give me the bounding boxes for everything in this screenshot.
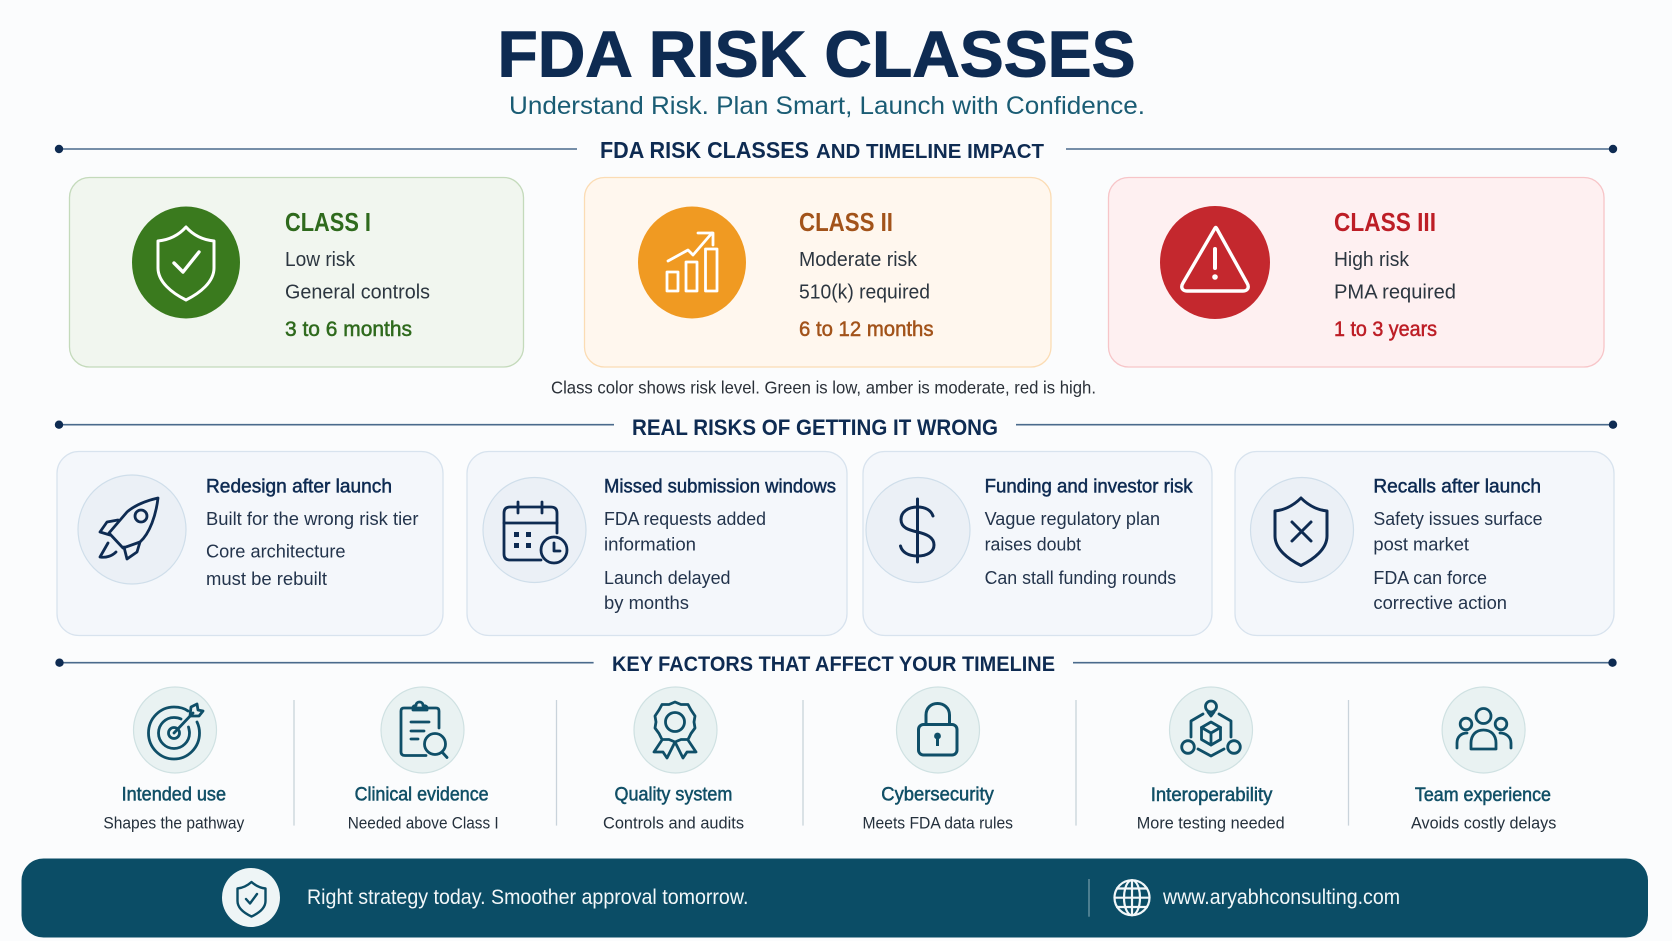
section heading: key factors (55, 652, 1617, 676)
text: class III details: CLASS III (1334, 207, 1436, 237)
icon: rosette ribbon (634, 687, 717, 773)
text: class II details: CLASS II (799, 207, 893, 237)
panel: funding and investor risk (863, 452, 1212, 636)
text: class I details: Low risk (285, 248, 356, 271)
text: class II details: 510(k) required (799, 280, 930, 304)
factor: intended use: Intended use (122, 784, 226, 806)
factor: cybersecurity: Cybersecurity (881, 784, 994, 806)
text: class I details: General controls (285, 280, 430, 304)
icon: amber rising chart (638, 206, 746, 318)
factor: quality system: Quality system (614, 784, 732, 806)
text: missed submission windows: information (604, 534, 696, 555)
factor: quality system (603, 687, 744, 832)
website: www.aryabhconsulting.com (1162, 886, 1400, 909)
text: missed submission windows (604, 476, 836, 613)
text: funding and investor risk (985, 476, 1193, 588)
icon: red warning triangle (1160, 206, 1270, 319)
factor: clinical evidence: Clinical evidence (355, 784, 489, 806)
panel: missed submission windows (467, 452, 847, 636)
text: class II details: 6 to 12 months (799, 318, 934, 341)
factor: interoperability: More testing needed (1137, 814, 1285, 832)
text: funding and investor risk: raises doubt (985, 534, 1081, 555)
text: redesign after launch: Redesign after launch (206, 476, 392, 498)
text: redesign after launch: Core architecture (206, 541, 346, 562)
factor: team experience: Avoids costly delays (1411, 814, 1556, 832)
factor: cybersecurity: Meets FDA data rules (862, 814, 1013, 832)
text: recalls after launch (1373, 476, 1543, 613)
subtitle: Understand Risk. Plan Smart, Launch with Confidence. (509, 92, 1145, 120)
text: recalls after launch: Safety issues surface (1373, 508, 1543, 529)
text: class I details: CLASS I (285, 207, 371, 237)
factor: team experience (1411, 687, 1556, 832)
tagline: Right strategy today. Smoother approval tomorrow. (307, 886, 748, 909)
text: recalls after launch: corrective action (1373, 592, 1507, 613)
section heading: real risks: REAL RISKS OF GETTING IT WRONG (632, 415, 998, 440)
factor: quality system: Controls and audits (603, 814, 744, 832)
legend note: Class color shows risk level. Green is low, amber is moderate, red is high. (551, 378, 1096, 398)
icon: rocket (78, 475, 186, 584)
section heading: risk classes (55, 137, 1617, 163)
icon: shield badge (222, 868, 280, 927)
title: FDA RISK CLASSES (498, 18, 1136, 90)
panel: class III (1108, 178, 1604, 367)
text: missed submission windows: FDA requests added (604, 508, 766, 529)
panel: class II (584, 178, 1051, 367)
factor: team experience: Team experience (1415, 785, 1551, 806)
icon: team of three people (1442, 687, 1525, 773)
text: redesign after launch: must be rebuilt (206, 568, 327, 589)
text: funding and investor risk: Can stall funding rounds (985, 567, 1176, 588)
factor: interoperability: Interoperability (1151, 785, 1273, 806)
factor: intended use: Shapes the pathway (103, 814, 245, 832)
text: recalls after launch: Recalls after launch (1373, 476, 1541, 498)
icon: padlock (896, 687, 980, 773)
icon: calendar with clock (483, 478, 586, 582)
panel: recalls after launch (1235, 452, 1614, 636)
text: class III details: High risk (1334, 248, 1410, 271)
text: class II details: Moderate risk (799, 248, 918, 271)
icon: target with arrow (134, 687, 216, 773)
icon: dollar sign (866, 478, 970, 582)
factor: intended use (103, 687, 245, 832)
section heading: risk classes: FDA RISK CLASSES (600, 137, 809, 163)
panel: redesign after launch (57, 452, 443, 636)
text: class III details: PMA required (1334, 280, 1456, 304)
icon: shield with x (1250, 478, 1354, 582)
factor: clinical evidence (348, 687, 499, 832)
text: class I details (285, 207, 430, 341)
section heading: risk classes: AND TIMELINE IMPACT (816, 141, 1044, 163)
text: redesign after launch (206, 476, 418, 589)
icon: globe (1114, 880, 1150, 915)
factor: cybersecurity (862, 687, 1013, 832)
text: missed submission windows: Launch delayed (604, 567, 730, 588)
text: recalls after launch: post market (1373, 534, 1469, 555)
icon: green shield with check (132, 206, 240, 318)
text: class II details (799, 207, 934, 341)
text: funding and investor risk: Vague regulatory plan (985, 508, 1160, 529)
text: redesign after launch: Built for the wrong risk tier (206, 508, 418, 529)
text: class III details: 1 to 3 years (1334, 318, 1437, 341)
panel: class I (70, 178, 524, 367)
factor: interoperability (1137, 687, 1285, 832)
section heading: key factors: KEY FACTORS THAT AFFECT YOUR TIMELINE (612, 652, 1055, 676)
text: missed submission windows: by months (604, 592, 689, 613)
text: class I details: 3 to 6 months (285, 318, 412, 341)
text: funding and investor risk: Funding and investor risk (985, 476, 1193, 498)
text: missed submission windows: Missed submission windows (604, 476, 836, 498)
factor: clinical evidence: Needed above Class I (348, 814, 499, 832)
icon: clipboard with magnifier (381, 687, 464, 773)
section heading: real risks (55, 415, 1617, 440)
text: recalls after launch: FDA can force (1373, 567, 1487, 588)
footer banner (22, 858, 1648, 938)
icon: connected cube network (1170, 687, 1252, 773)
text: class III details (1334, 207, 1456, 341)
